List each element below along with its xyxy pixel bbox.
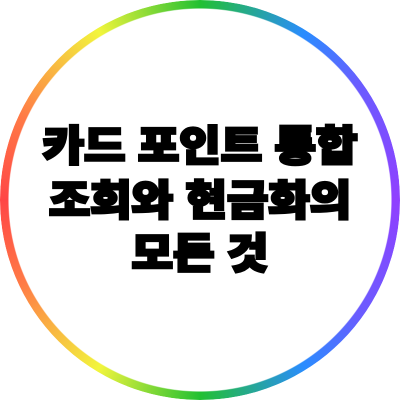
title: 모든 것 [132,231,268,278]
title: 카드 포인트 통합 [43,123,357,170]
title [42,123,358,278]
title: 조회와 현금화의 [49,177,351,224]
